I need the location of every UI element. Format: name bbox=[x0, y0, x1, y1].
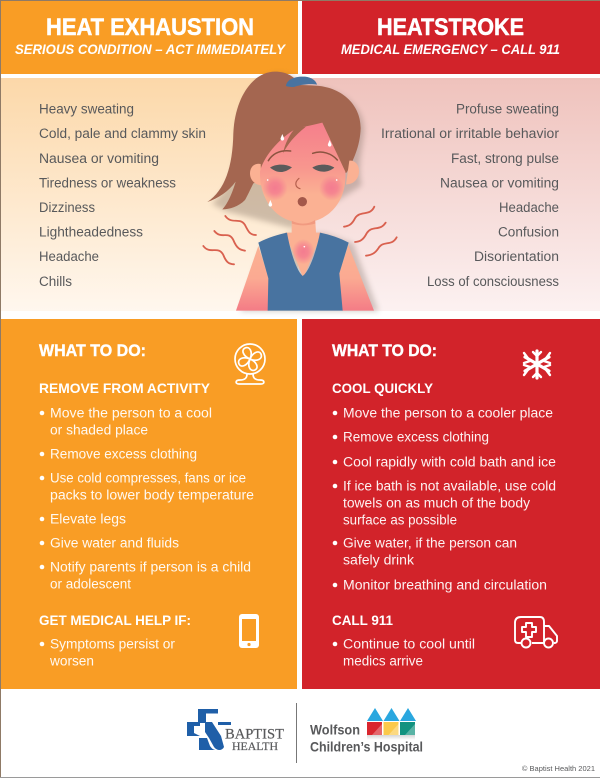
chin shadow bbox=[292, 220, 315, 225]
bullet list: call 911: Continue to cool until bbox=[343, 636, 475, 651]
panel: heat exhaustion symptoms: Tiredness or weakness bbox=[39, 176, 176, 190]
panel: heat exhaustion symptoms: Nausea or vomiting bbox=[39, 151, 159, 166]
hair and ponytail bbox=[207, 72, 361, 209]
blue tank top bbox=[258, 233, 349, 311]
icon: phone bbox=[239, 614, 259, 648]
bullet list: call 911 bbox=[333, 636, 475, 668]
icon: baptist cross and florida bbox=[187, 709, 231, 750]
logo: baptist health: BAPTIST bbox=[225, 726, 284, 742]
face bbox=[260, 123, 345, 223]
panel: heat exhaustion symptoms bbox=[1, 78, 298, 311]
bullet list: remove from activity: Give water and fluids bbox=[50, 535, 179, 550]
panel: heat exhaustion symptoms: Heavy sweating bbox=[39, 102, 134, 116]
subheading: remove from activity: REMOVE FROM ACTIVITY bbox=[39, 380, 211, 396]
mouth bbox=[298, 197, 307, 206]
panel: heat exhaustion what to do bbox=[1, 319, 297, 689]
title: heatstroke: HEATSTROKE bbox=[377, 14, 524, 41]
panel: heat exhaustion symptoms: Chills bbox=[39, 274, 72, 289]
neck and chest bbox=[285, 217, 322, 278]
arms bbox=[236, 245, 374, 311]
bullet list: remove from activity bbox=[40, 405, 254, 591]
subheading: get medical help if: GET MEDICAL HELP IF: bbox=[39, 612, 191, 628]
panel: heatstroke symptoms bbox=[302, 78, 600, 311]
logo: wolfson children's hospital: Children’s Hospital bbox=[310, 738, 423, 754]
bullet list: cool quickly: If ice bath is not available, use cold bbox=[343, 478, 556, 493]
logo: baptist health: HEALTH bbox=[232, 739, 278, 753]
bullet list: cool quickly: Give water, if the person can bbox=[343, 535, 517, 550]
sweat drops bbox=[267, 134, 337, 207]
bullet list: cool quickly bbox=[333, 405, 556, 592]
title: heat exhaustion: HEAT EXHAUSTION bbox=[46, 14, 254, 41]
bullet list: cool quickly: Cool rapidly with cold bath and ice bbox=[343, 454, 556, 469]
bullet list: cool quickly: Remove excess clothing bbox=[343, 429, 489, 444]
bullet list: remove from activity: or adolescent bbox=[50, 576, 131, 591]
eyes bbox=[270, 165, 334, 172]
bullet list: remove from activity: Remove excess clothing bbox=[50, 446, 197, 461]
panel: heatstroke symptoms: Loss of consciousness bbox=[427, 274, 559, 289]
bullet list: remove from activity: Elevate legs bbox=[50, 511, 126, 526]
panel: heat exhaustion symptoms: Dizziness bbox=[39, 200, 95, 215]
bullet list: cool quickly: surface as possible bbox=[343, 512, 457, 527]
subheading: cool quickly: COOL QUICKLY bbox=[332, 380, 434, 396]
illustration: overheated girl bbox=[203, 72, 397, 311]
bullet list: remove from activity: or shaded place bbox=[50, 422, 148, 437]
header: heat exhaustion bbox=[1, 1, 298, 74]
copyright: © Baptist Health 2021 bbox=[522, 764, 595, 773]
panel: heatstroke what to do bbox=[302, 319, 600, 689]
panel: heatstroke symptoms: Fast, strong pulse bbox=[451, 151, 559, 166]
panel: heatstroke symptoms: Irrational or irritable behavior bbox=[381, 126, 560, 141]
panel: heatstroke symptoms: Confusion bbox=[498, 224, 559, 240]
bullet list: call 911: medics arrive bbox=[343, 653, 423, 668]
heat waves bbox=[203, 207, 397, 264]
heading: what to do: WHAT TO DO: bbox=[332, 341, 437, 360]
panel: heatstroke symptoms: Headache bbox=[499, 200, 559, 215]
ears bbox=[250, 161, 359, 185]
bullet list: cool quickly: Move the person to a cooler place bbox=[343, 405, 553, 420]
panel: heat exhaustion symptoms: Headache bbox=[39, 249, 99, 264]
panel: heatstroke symptoms: Nausea or vomiting bbox=[440, 176, 559, 190]
bullet list: remove from activity: packs to lower body temperature bbox=[50, 487, 254, 502]
icon: ambulance bbox=[515, 617, 557, 648]
bullet list: cool quickly: Monitor breathing and circulation bbox=[343, 577, 547, 592]
hair strand over forehead bbox=[283, 127, 306, 153]
bullet list: remove from activity: Notify parents if person is a child bbox=[50, 559, 251, 574]
heading: what to do: WHAT TO DO: bbox=[39, 341, 146, 360]
panel: heatstroke symptoms: Profuse sweating bbox=[456, 102, 559, 116]
subtitle: serious condition: SERIOUS CONDITION – ACT IMMEDIATELY bbox=[15, 41, 287, 57]
panel: heatstroke symptoms: Disorientation bbox=[474, 249, 559, 264]
bullet list: cool quickly: safely drink bbox=[343, 552, 414, 567]
icon: three houses bbox=[367, 708, 416, 740]
icon: snowflake bbox=[524, 351, 550, 378]
logo: baptist health bbox=[187, 709, 284, 753]
bullet list: get medical help: Symptoms persist or bbox=[50, 636, 176, 651]
subtitle: medical emergency: MEDICAL EMERGENCY – CALL 911 bbox=[341, 41, 560, 57]
bullet list: get medical help: worsen bbox=[49, 653, 94, 668]
bullet list: get medical help bbox=[40, 636, 176, 668]
bullet list: cool quickly: towels on as much of the body bbox=[343, 495, 530, 510]
cheeks bbox=[262, 175, 344, 201]
header: heatstroke bbox=[302, 1, 600, 74]
icon: fan bbox=[235, 344, 265, 384]
eyebrows bbox=[268, 151, 337, 161]
bullet list: remove from activity: Move the person to a cool bbox=[50, 405, 212, 420]
scrunchie bbox=[286, 77, 317, 87]
nose bbox=[296, 178, 300, 189]
subheading: call 911: CALL 911 bbox=[332, 612, 393, 628]
panel: heat exhaustion symptoms: Lightheadedness bbox=[39, 224, 143, 240]
bullet list: remove from activity: Use cold compresses, fans or ice bbox=[50, 470, 246, 485]
panel: heat exhaustion symptoms: Cold, pale and clammy skin bbox=[39, 126, 206, 141]
logo: wolfson children's hospital: Wolfson bbox=[310, 722, 360, 738]
logo: wolfson children's hospital bbox=[310, 708, 423, 754]
